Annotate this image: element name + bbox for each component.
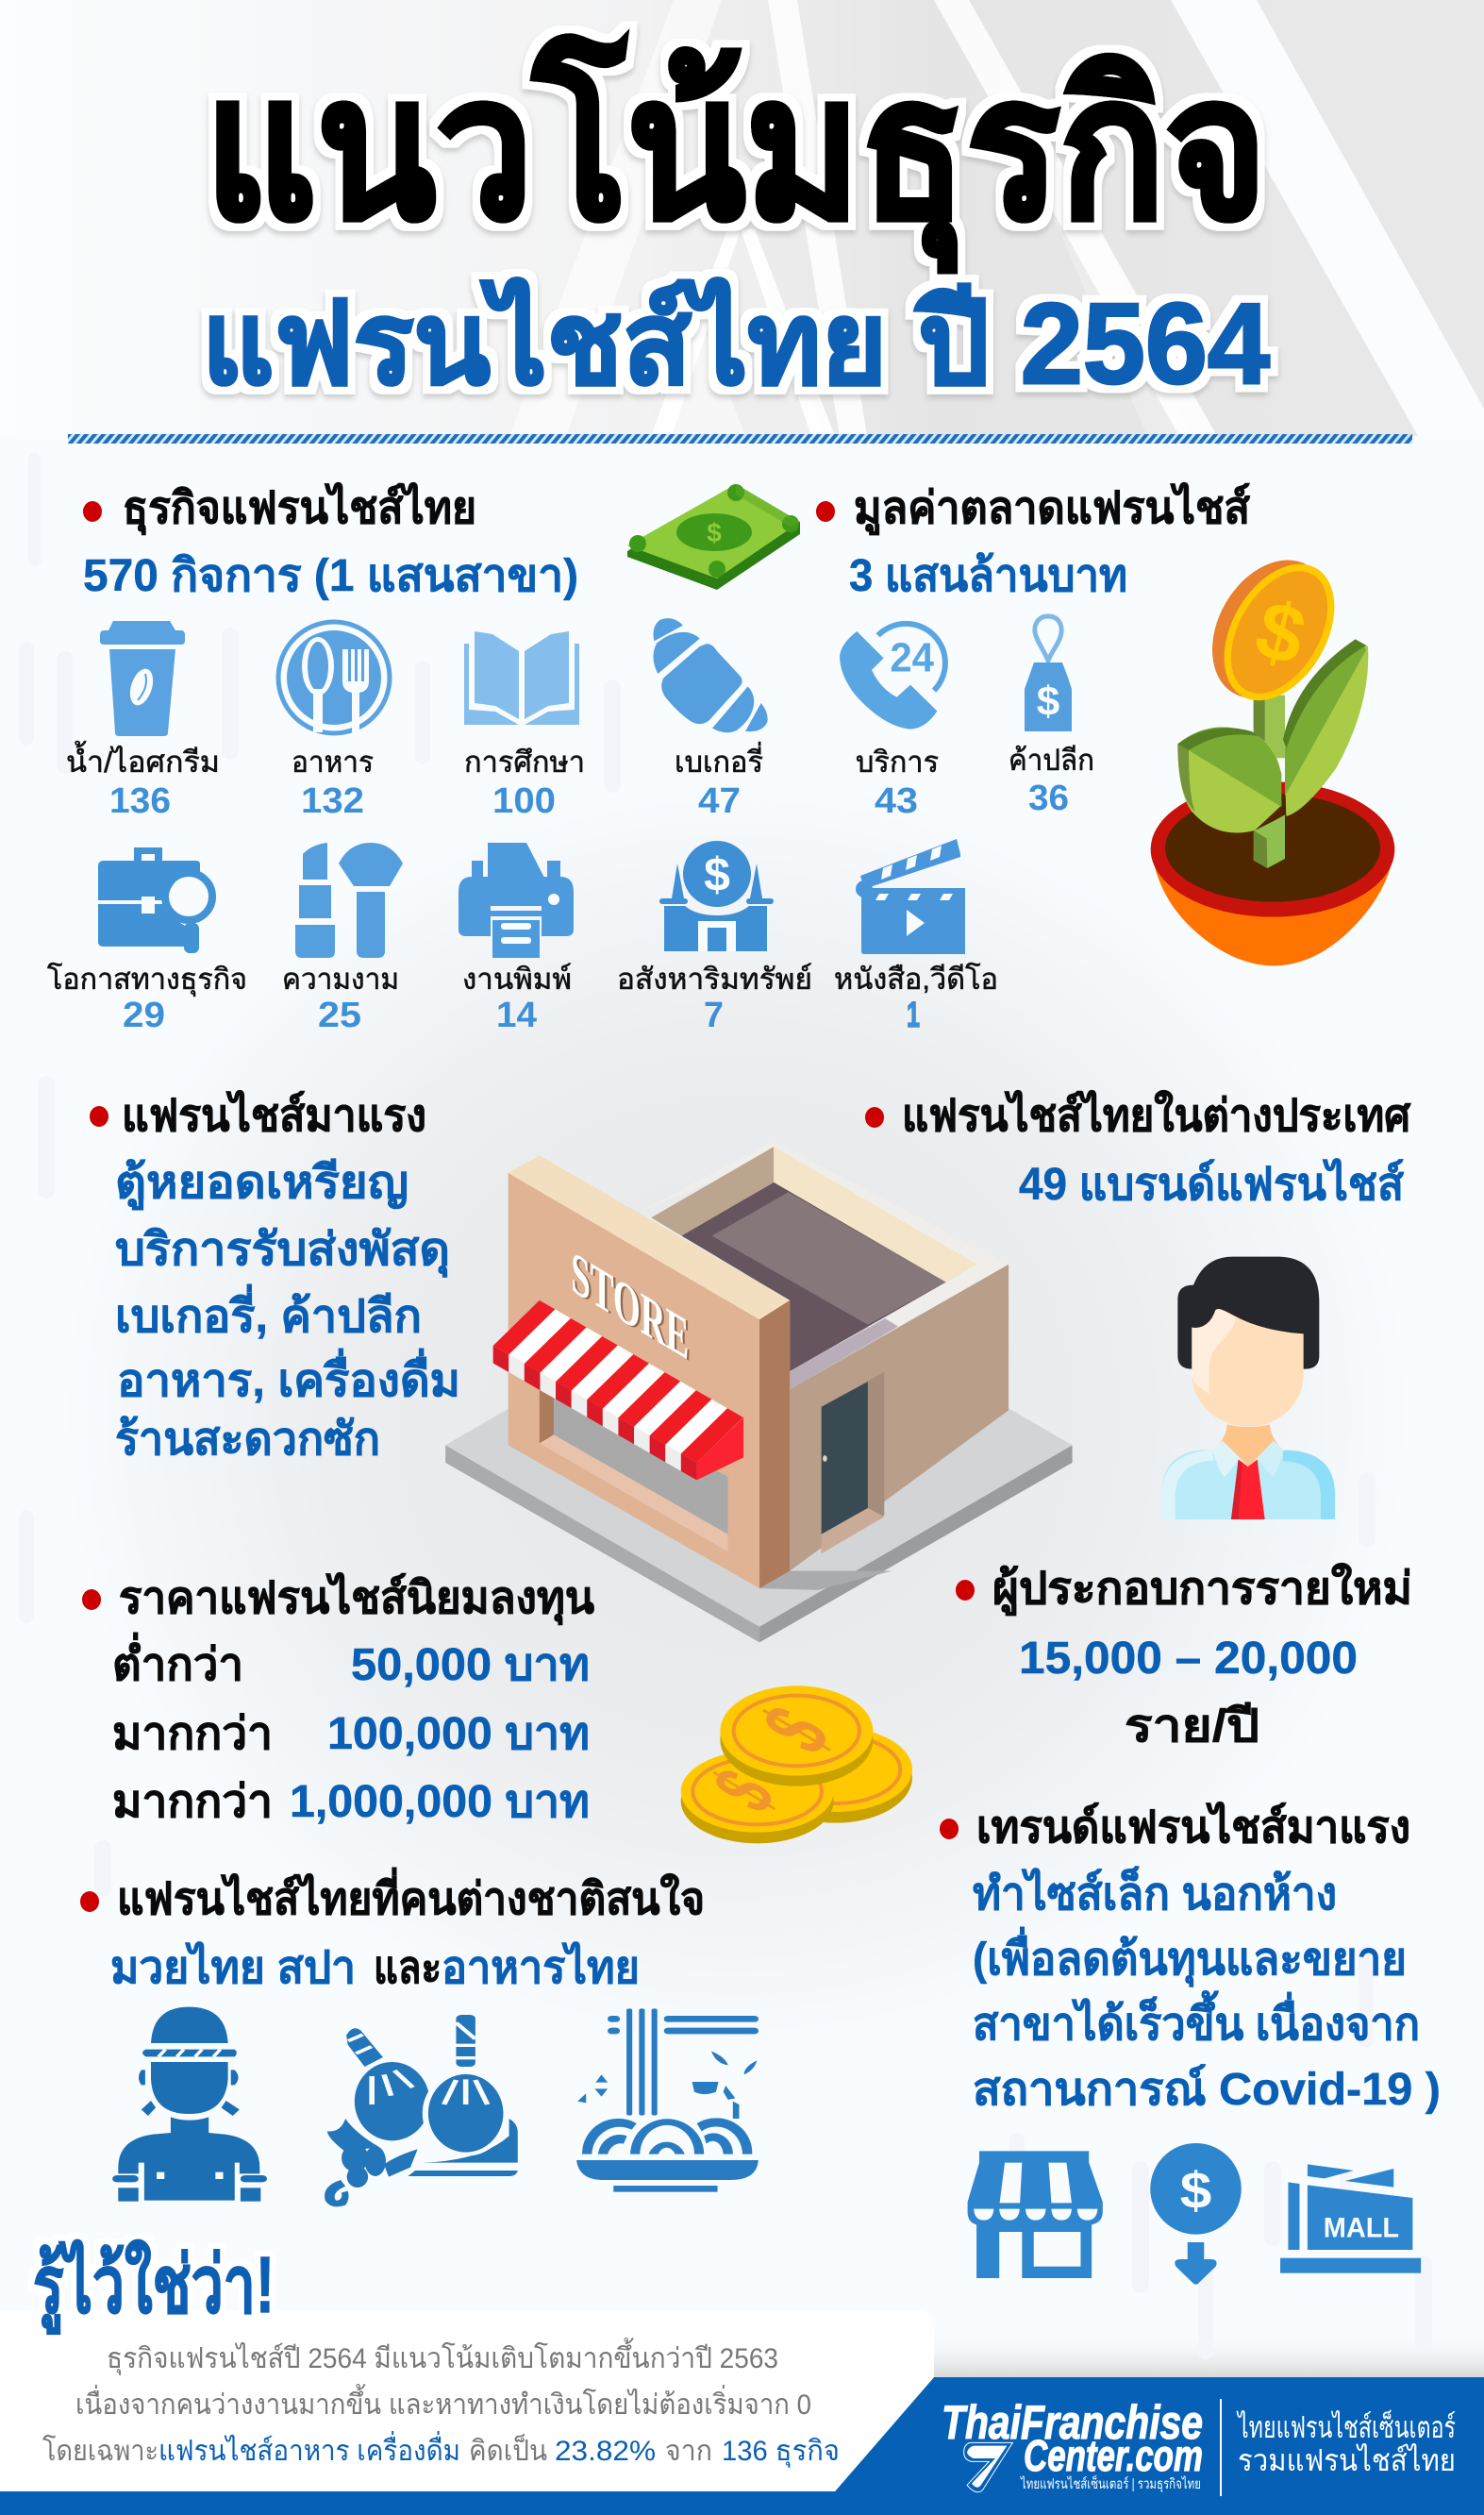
panel: franchise trends: (เพื่อลดต้นทุนและขยาย (973, 1926, 1407, 1987)
panel: did you know (0, 2239, 934, 2491)
panel: franchises foreigners like: แฟรนไชส์ไทยที่คนต่างชาติสนใจ (117, 1867, 705, 1923)
icon: lower cost dollar arrow (1150, 2143, 1242, 2285)
category labels row 2 (47, 963, 998, 998)
panel: hot franchises: ตู้หยอดเหรียญ (115, 1158, 409, 1211)
icon: banknote (627, 484, 800, 590)
icon: noodle bowl (576, 2008, 759, 2192)
category labels row 1 (66, 741, 1094, 779)
category counts row 2 (123, 996, 920, 1035)
icon: 24 hour phone: 24 (890, 636, 934, 681)
striped awning (493, 1300, 743, 1480)
panel: Thai franchise businesses heading (83, 481, 578, 601)
panel: Thai franchises abroad: 49 แบรนด์แฟรนไชส์ (1019, 1157, 1405, 1210)
category counts row 1: 132 (301, 781, 364, 821)
icon: briefcase with magnifier (98, 847, 212, 953)
category counts row 2: 7 (704, 996, 724, 1035)
category counts row 2: 14 (496, 996, 537, 1035)
panel: market value heading: มูลค่าตลาดแฟรนไชส์ (854, 481, 1250, 536)
icon: price tag: $ (1037, 679, 1059, 725)
hatched divider (68, 434, 1412, 444)
panel: hot franchises: ร้านสะดวกซัก (115, 1415, 380, 1465)
category counts row 1: 43 (875, 781, 918, 821)
panel: hot franchises: เบเกอรี่, ค้าปลีก (115, 1283, 422, 1342)
category counts row 2: 1 (907, 996, 920, 1035)
panel: Thai franchises abroad: แฟรนไชส์ไทยในต่างประเทศ (902, 1089, 1411, 1140)
icon: businessman (1161, 1257, 1335, 1519)
subtitle: แฟรนไชส์ไทย ปี 2564 (202, 278, 1270, 408)
icon: 24 hour phone (840, 624, 945, 729)
panel: did you know: คิดเป็น (469, 2433, 547, 2467)
category counts row 2: 25 (318, 996, 361, 1035)
panel: popular investment price: 50,000 บาท (351, 1640, 590, 1690)
logo: ThaiFranchise Center: ไทยแฟรนไชส์เซ็นเตอร์ | รวมธุรกิจไทย (1020, 2474, 1201, 2493)
panel: franchises foreigners like (80, 1867, 705, 1993)
icon: plate with spoon and fork (278, 622, 390, 733)
footer tagline (1236, 2409, 1456, 2477)
logo: ThaiFranchise Center: ThaiFranchise (942, 2396, 1203, 2449)
icon: mall building: MALL (1324, 2212, 1399, 2243)
panel: Thai franchise businesses heading: 570 กิจการ (1 แสนสาขา) (83, 551, 578, 601)
logo: ThaiFranchise Center: Center.com (1024, 2431, 1203, 2480)
category counts row 2: 29 (123, 996, 165, 1035)
icon: gold coins (681, 1685, 912, 1843)
icon: real estate coin and building: $ (704, 848, 730, 901)
panel: franchise trends: ทำไซส์เล็ก นอกห้าง (973, 1866, 1337, 1920)
category counts row 1: 47 (698, 781, 741, 821)
panel: Thai franchise businesses heading: ธุรกิจแฟรนไชส์ไทย (123, 481, 476, 535)
category counts row 1 (109, 779, 1069, 821)
category labels row 1: บริการ (856, 746, 939, 779)
category labels row 2: โอกาสทางธุรกิจ (47, 963, 247, 998)
panel: popular investment price: 1,000,000 บาท (290, 1777, 590, 1827)
panel: did you know: 23.82% (555, 2436, 656, 2467)
icon: small shop (968, 2151, 1103, 2278)
icon: price tag (1025, 616, 1072, 731)
panel: did you know: แฟรนไชส์อาหาร เครื่องดื่ม (158, 2431, 460, 2467)
panel: popular investment price: มากกว่า (112, 1777, 273, 1827)
category labels row 2: งานพิมพ์ (462, 963, 572, 996)
category counts row 1: 36 (1028, 779, 1069, 818)
footer tagline: รวมแฟรนไชส์ไทย (1238, 2443, 1456, 2477)
icon: mall building (1280, 2164, 1421, 2273)
panel: new entrepreneurs: ราย/ปี (1125, 1702, 1259, 1752)
icon: gold coins: $ (694, 1754, 793, 1826)
category counts row 1: 100 (492, 781, 556, 821)
panel: Thai franchises abroad (865, 1089, 1411, 1210)
title: แนวโน้มธุรกิจ (205, 34, 1267, 273)
panel: market value heading (816, 481, 1250, 601)
icon: lipstick and brush (295, 843, 403, 958)
footer divider (1220, 2399, 1222, 2496)
category labels row 1: ค้าปลีก (1009, 744, 1094, 777)
panel: hot franchises: แฟรนไชส์มาแรง (122, 1089, 426, 1140)
panel: franchises foreigners like: อาหารไทย (442, 1940, 640, 1993)
icon: real estate coin and building (659, 841, 774, 951)
category labels row 1: การศึกษา (464, 746, 585, 779)
illustration: isometric store (445, 1142, 1073, 1642)
panel: franchise trends: เทรนด์แฟรนไชส์มาแรง (976, 1801, 1410, 1852)
panel: did you know: จาก (665, 2436, 712, 2467)
store sign (571, 1237, 691, 1375)
panel: franchise trends: สถานการณ์ Covid-19 ) (973, 2064, 1441, 2115)
icon: muay thai boxer (112, 2007, 267, 2202)
panel: hot franchises: อาหาร, เครื่องดื่ม (117, 1348, 460, 1406)
panel: franchises foreigners like: มวยไทย สปา (110, 1940, 356, 1993)
panel: popular investment price: 100,000 บาท (327, 1709, 590, 1759)
category counts row 1: 136 (109, 781, 171, 821)
panel: did you know: ธุรกิจแฟรนไชส์ปี 2564 มีแนวโน้มเติบโตมากขึ้นกว่าปี 2563 (107, 2338, 778, 2376)
icon: gold coins: $ (743, 1691, 850, 1769)
panel: popular investment price (82, 1571, 594, 1827)
icon: lower cost dollar arrow: $ (1180, 2162, 1211, 2220)
panel: did you know: เนื่องจากคนว่างงานมากขึ้น และหาทางทำเงินโดยไม่ต้องเริ่มจาก 0 (75, 2384, 811, 2421)
logo: ThaiFranchise Center (942, 2396, 1203, 2493)
panel: did you know: โดยเฉพาะ (42, 2434, 158, 2467)
category labels row 1: เบเกอรี่ (675, 742, 763, 779)
panel: did you know: รู้ไว้ใช่ว่า! (33, 2239, 275, 2335)
panel: business categories grid (47, 616, 1094, 1035)
footer band (0, 2377, 1484, 2515)
panel: market value heading: 3 แสนล้านบาท (849, 551, 1127, 601)
panel: franchise trends: สาขาได้เร็วขึ้น เนื่องจาก (973, 1990, 1420, 2050)
icon: coin plant in pot (1151, 539, 1394, 965)
panel: hot franchises (90, 1089, 460, 1465)
icon: banknote: $ (707, 518, 722, 547)
icon: open book (464, 631, 579, 725)
icon: herbal compress balls (325, 2015, 518, 2206)
category labels row 1: อาหาร (292, 746, 374, 779)
panel: popular investment price: ราคาแฟรนไชส์นิยมลงทุน (119, 1571, 594, 1625)
icon: printer (459, 843, 574, 958)
panel: new entrepreneurs: 15,000 – 20,000 (1019, 1634, 1358, 1684)
panel: popular investment price: มากกว่า (112, 1709, 273, 1759)
category labels row 2: ความงาม (282, 963, 399, 996)
panel: hot franchises: บริการรับส่งพัสดุ (115, 1225, 450, 1278)
panel: did you know: 136 ธุรกิจ (722, 2436, 840, 2469)
panel: franchise trends (940, 1801, 1441, 2115)
category labels row 1: น้ำ/ไอศกรีม (66, 741, 220, 779)
icon: film clapper (856, 839, 965, 954)
icon: coin plant in pot: $ (1247, 583, 1314, 683)
panel: franchises foreigners like: และ (374, 1943, 442, 1993)
panel: new entrepreneurs: ผู้ประกอบการรายใหม่ (992, 1562, 1412, 1617)
illustration: isometric store: STORE (571, 1237, 689, 1373)
icon: croissant (653, 618, 768, 732)
icon: coffee cup (100, 621, 185, 736)
panel: new entrepreneurs (956, 1562, 1412, 1752)
illustration: isometric store: STORE (574, 1238, 691, 1375)
category labels row 2: หนังสือ,วีดีโอ (834, 963, 998, 996)
panel: popular investment price: ต่ำกว่า (112, 1632, 243, 1690)
category labels row 2: อสังหาริมทรัพย์ (617, 963, 812, 996)
